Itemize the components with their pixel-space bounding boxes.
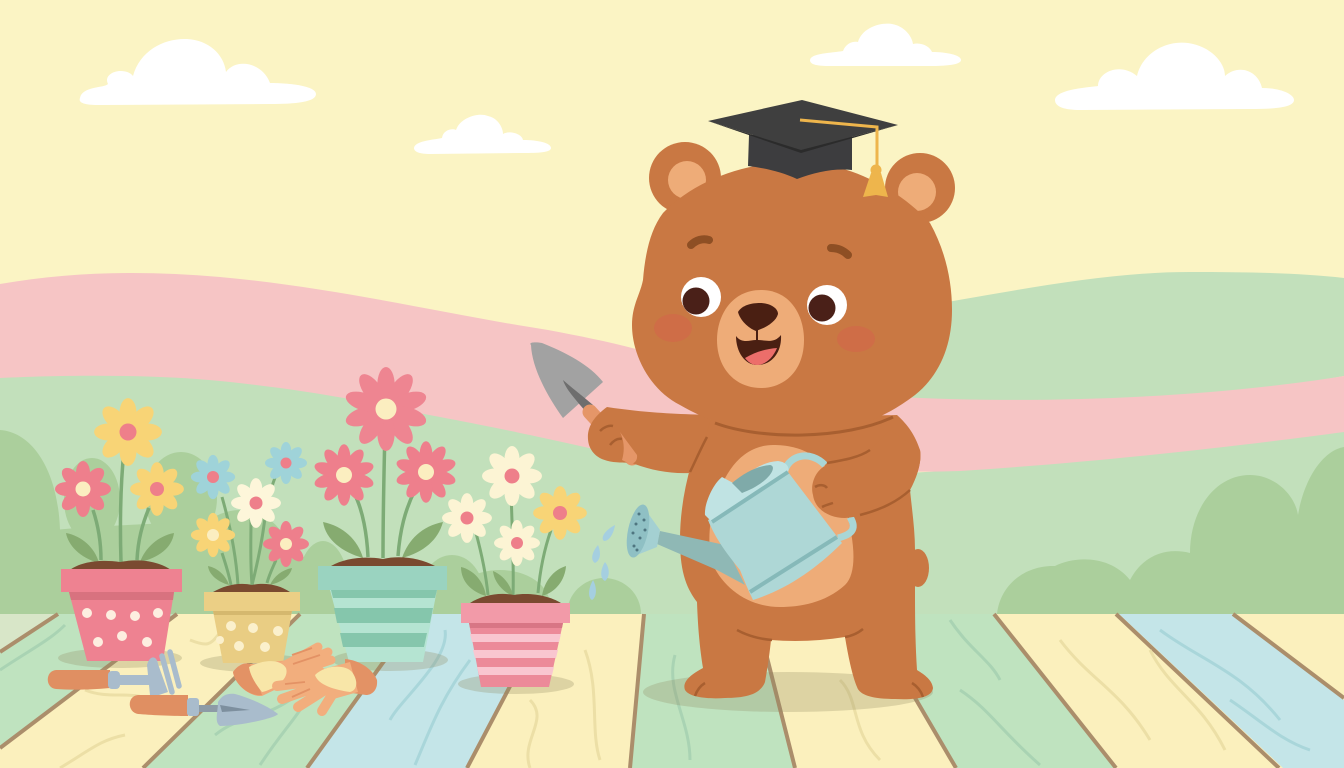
trowel handle end xyxy=(620,432,637,464)
bear leg lines xyxy=(695,629,923,697)
gardening gloves xyxy=(233,647,377,711)
hill: green front xyxy=(0,376,1344,620)
cloud: top centre xyxy=(810,24,961,66)
hill: pink back hill xyxy=(0,273,900,480)
ground shadows xyxy=(58,648,933,712)
water drops xyxy=(589,525,615,600)
pink ribbon right xyxy=(880,376,1344,472)
watering can xyxy=(589,456,853,600)
plant: pot 4 pink striped xyxy=(442,446,587,687)
plant: pot 1 pink flowers xyxy=(55,398,184,661)
bear tail xyxy=(907,549,929,587)
trowel held xyxy=(530,342,632,458)
hand rake xyxy=(48,652,179,696)
bear left arm xyxy=(588,407,712,473)
plant: pot 3 teal striped xyxy=(313,367,457,662)
wooden deck xyxy=(0,614,1344,768)
bushes left xyxy=(0,430,641,650)
bushes right xyxy=(997,447,1344,614)
bear body and legs xyxy=(680,415,933,699)
cloud: small centre xyxy=(414,115,551,154)
bear xyxy=(530,100,955,699)
bear right arm xyxy=(812,430,921,518)
bear head xyxy=(632,162,952,435)
bear belly xyxy=(709,445,853,607)
bear face xyxy=(654,239,875,388)
bear ears xyxy=(649,142,955,223)
plant: pot 2 yellow xyxy=(191,442,309,663)
hill: green right xyxy=(900,272,1344,401)
cloud: top left xyxy=(80,39,316,105)
graduation cap xyxy=(708,100,898,197)
hand trowel xyxy=(130,694,278,726)
cloud: top right xyxy=(1055,43,1294,110)
